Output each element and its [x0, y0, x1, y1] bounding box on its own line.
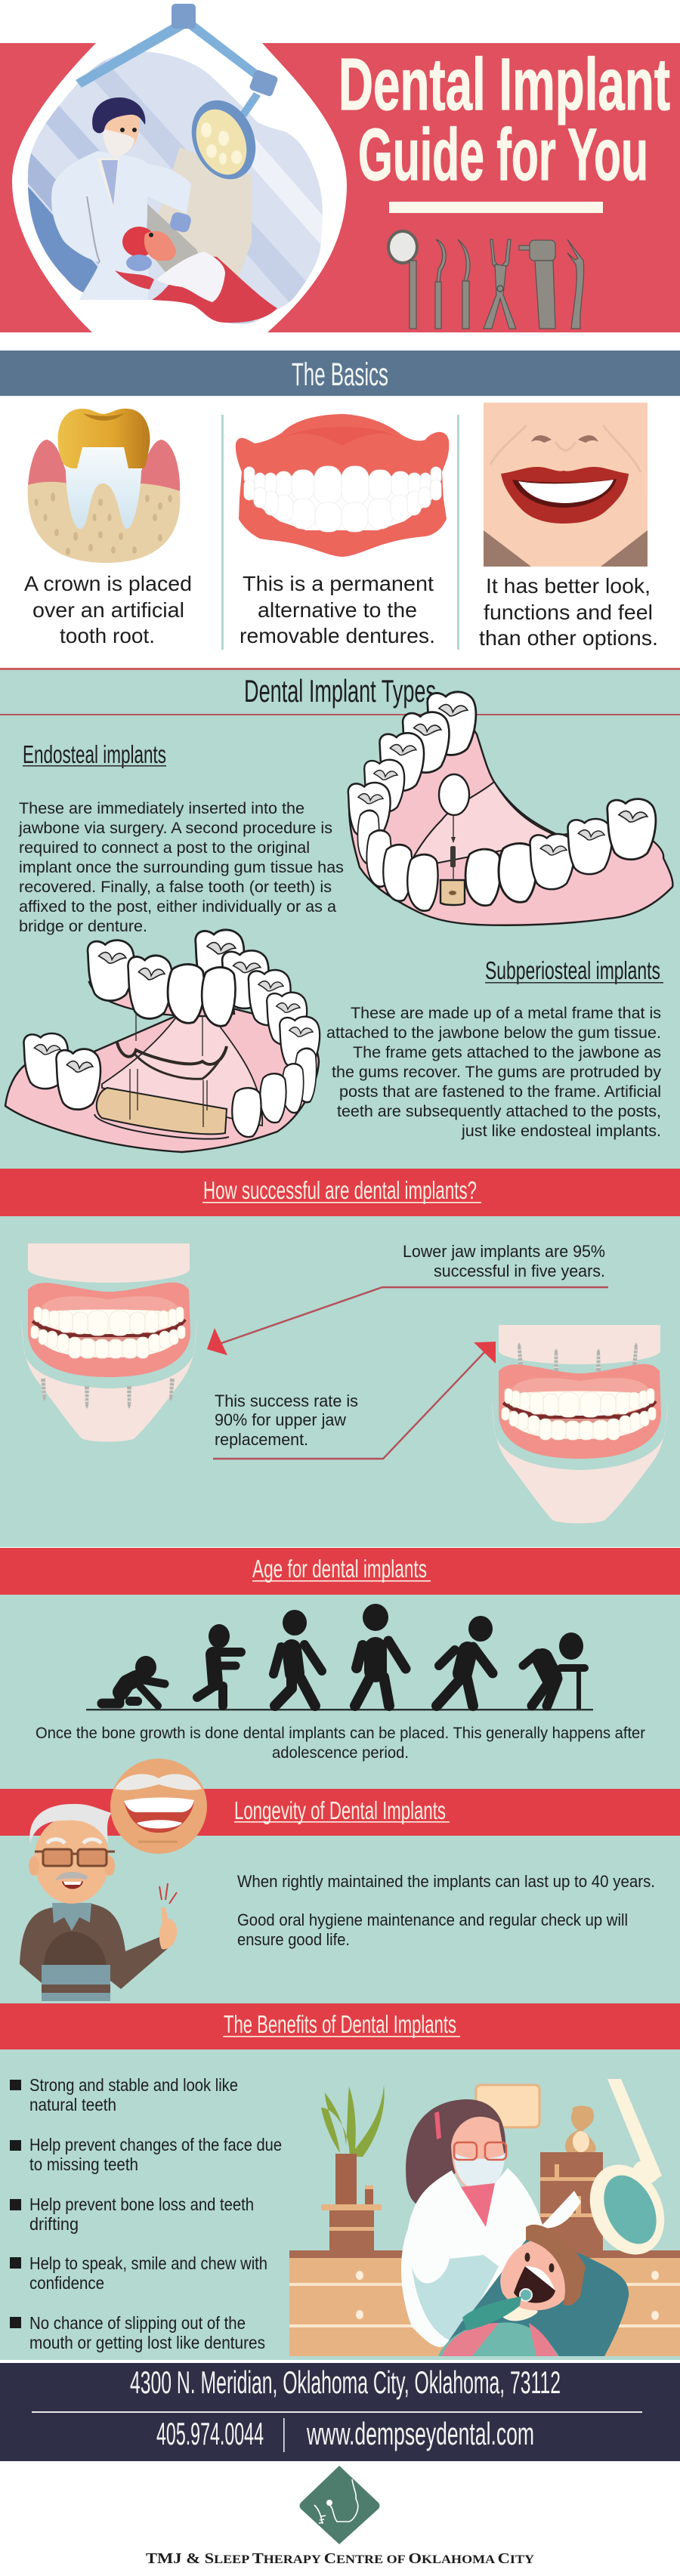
text: age description: adolescence period.	[272, 1744, 409, 1762]
doctor head	[103, 113, 139, 155]
text: upper jaw success	[215, 1391, 358, 1449]
list: benefits: Help prevent changes of the face due	[29, 2135, 282, 2154]
figure: crawling baby	[102, 1656, 165, 1706]
text: upper jaw success: 90% for upper jaw	[215, 1410, 346, 1429]
text: age description	[36, 1725, 645, 1762]
strip: white separator	[0, 2360, 680, 2363]
text: endosteal description: affixed to the post, either individually or as a	[19, 898, 336, 916]
heading band: longevity	[0, 1789, 680, 1836]
icons: dental tools	[388, 231, 584, 329]
text: subperiosteal description: just like endosteal implants.	[461, 1123, 661, 1140]
text: age description: Once the bone growth is done dental implants can be placed. This generally happens after	[36, 1725, 645, 1742]
lamp head	[181, 91, 267, 189]
text: denture caption	[240, 572, 435, 647]
text: lower jaw success: successful in five years.	[434, 1262, 605, 1280]
arrow: to upper jaw	[213, 1342, 496, 1459]
illustration: dentist and patient	[27, 4, 323, 323]
text: longevity description: When rightly maintained the implants can last up to 40 years.	[237, 1872, 655, 1891]
text: phone: 405.974.0044	[156, 2416, 264, 2451]
text: endosteal description: implant once the surrounding gum tissue has	[19, 859, 344, 876]
patient	[152, 257, 277, 323]
illustration: subperiosteal jaw	[5, 930, 320, 1152]
doctor coat	[51, 151, 191, 300]
panel: success rates	[0, 1169, 680, 1547]
figure: toddler	[197, 1624, 241, 1706]
panel: longevity	[0, 1759, 680, 2003]
text: endosteal description: bridge or denture.	[19, 918, 147, 935]
text: denture caption: alternative to the	[258, 598, 417, 622]
icon: gold crown tooth	[28, 409, 180, 563]
panel: basics	[24, 403, 658, 650]
heading band: age	[0, 1548, 680, 1595]
panel: dental implant types	[0, 668, 680, 1169]
text: subperiosteal description	[326, 1005, 662, 1140]
text: look caption	[479, 574, 658, 650]
text: lower jaw success: Lower jaw implants are 95%	[403, 1242, 605, 1261]
text: longevity description: Good oral hygiene maintenance and regular check up will	[237, 1910, 628, 1929]
heading band: how successful	[0, 1169, 680, 1216]
divider: right	[457, 415, 459, 650]
text: crown caption: over an artificial	[32, 598, 184, 622]
text: upper jaw success: replacement.	[215, 1430, 308, 1449]
figure: elder with cane	[523, 1632, 585, 1709]
list: benefits	[10, 2075, 282, 2352]
panel: age for dental implants	[0, 1548, 680, 1789]
heading: dental implant types: Dental Implant Types	[244, 673, 436, 709]
title bar	[389, 202, 603, 213]
heading band: benefits	[0, 2003, 680, 2049]
heading band: age: Age for dental implants	[252, 1555, 427, 1583]
heading band: longevity: Longevity of Dental Implants	[234, 1796, 446, 1824]
text: look caption: than other options.	[479, 626, 658, 650]
list: benefits: Help prevent bone loss and teeth	[29, 2195, 254, 2214]
section band: The Basics	[0, 351, 680, 396]
text: endosteal description: These are immediately inserted into the	[19, 800, 304, 817]
icon: life stages	[86, 1604, 593, 1710]
list: benefits: No chance of slipping out of the	[29, 2313, 246, 2333]
list: benefits: drifting	[29, 2214, 79, 2234]
text: longevity description	[237, 1872, 655, 1949]
list: benefits: mouth or getting lost like dentures	[29, 2333, 265, 2352]
icon: smiling face	[484, 403, 648, 567]
title	[338, 43, 670, 196]
text: crown caption: A crown is placed	[24, 572, 192, 595]
text: denture caption: This is a permanent	[243, 572, 434, 595]
text: crown caption: tooth root.	[60, 624, 155, 647]
heading: endosteal implants: Endosteal implants	[23, 740, 166, 768]
heading band: benefits: The Benefits of Dental Implants	[224, 2010, 456, 2038]
figure: older adult	[437, 1616, 493, 1706]
list: benefits: Strong and stable and look like	[29, 2075, 238, 2095]
text: endosteal description: required to connect a post to the original	[19, 839, 310, 857]
footer rule	[32, 2411, 642, 2413]
text: longevity description: ensure good life.	[237, 1930, 350, 1949]
text: upper jaw success: This success rate is	[215, 1391, 358, 1410]
text: subperiosteal description: posts that are fastened to the frame. Artificial	[339, 1083, 661, 1101]
list: benefits: Help to speak, smile and chew with	[29, 2253, 267, 2273]
illustration: lower jaw implants	[21, 1243, 197, 1441]
text: crown caption	[24, 572, 192, 647]
list: benefits: confidence	[29, 2273, 104, 2293]
text: subperiosteal description: The frame gets attached to the jawbone as	[353, 1044, 661, 1061]
text: endosteal description: jawbone via surgery. A second procedure is	[18, 820, 332, 837]
text: subperiosteal description: the gums recover. The gums are protruded by	[332, 1064, 662, 1081]
text: endosteal description: recovered. Finally, a false tooth (or teeth) is	[19, 879, 332, 896]
heading band: how successful: How successful are dental implants?	[203, 1176, 477, 1204]
illustration: endosteal jaw	[348, 692, 672, 925]
text: subperiosteal description: These are made up of a metal frame that is	[351, 1005, 661, 1022]
illustration: smile close-up bubble	[110, 1759, 207, 1854]
list: benefits: natural teeth	[29, 2095, 116, 2114]
text: website: www.dempseydental.com	[306, 2416, 534, 2451]
divider: left	[221, 415, 224, 650]
text: subperiosteal description: teeth are subsequently attached to the posts,	[337, 1103, 661, 1120]
icon: dentures	[236, 414, 449, 557]
panel: benefits	[0, 2003, 680, 2360]
text: clinic name: TMJ & S LEEP THERAPY CENTRE OF OKLAHOMA CITY	[146, 2550, 535, 2567]
panel: contact footer	[0, 2363, 680, 2461]
text: lower jaw success	[403, 1242, 605, 1280]
text: endosteal description	[18, 800, 344, 935]
figure: child	[274, 1610, 322, 1706]
illustration: upper jaw implants	[492, 1325, 668, 1523]
logo: diamond mark	[299, 2466, 379, 2544]
white teardrop behind illustration	[12, 43, 347, 332]
list: benefits: to missing teeth	[29, 2154, 138, 2174]
text: look caption: functions and feel	[484, 601, 653, 624]
text: look caption: It has better look,	[486, 574, 651, 598]
hero banner	[0, 4, 680, 332]
illustration: smiling grandfather	[20, 1804, 177, 2001]
figure: adult	[355, 1604, 406, 1706]
contact divider	[283, 2418, 285, 2452]
illustration: dentist with child patient	[289, 2079, 680, 2356]
text: subperiosteal description: attached to the jawbone below the gum tissue.	[326, 1024, 661, 1042]
arrow: to lower jaw	[207, 1287, 608, 1355]
section band: The Basics: The Basics	[292, 357, 388, 393]
text: denture caption: removable dentures.	[240, 624, 435, 647]
lamp arms	[76, 20, 187, 88]
